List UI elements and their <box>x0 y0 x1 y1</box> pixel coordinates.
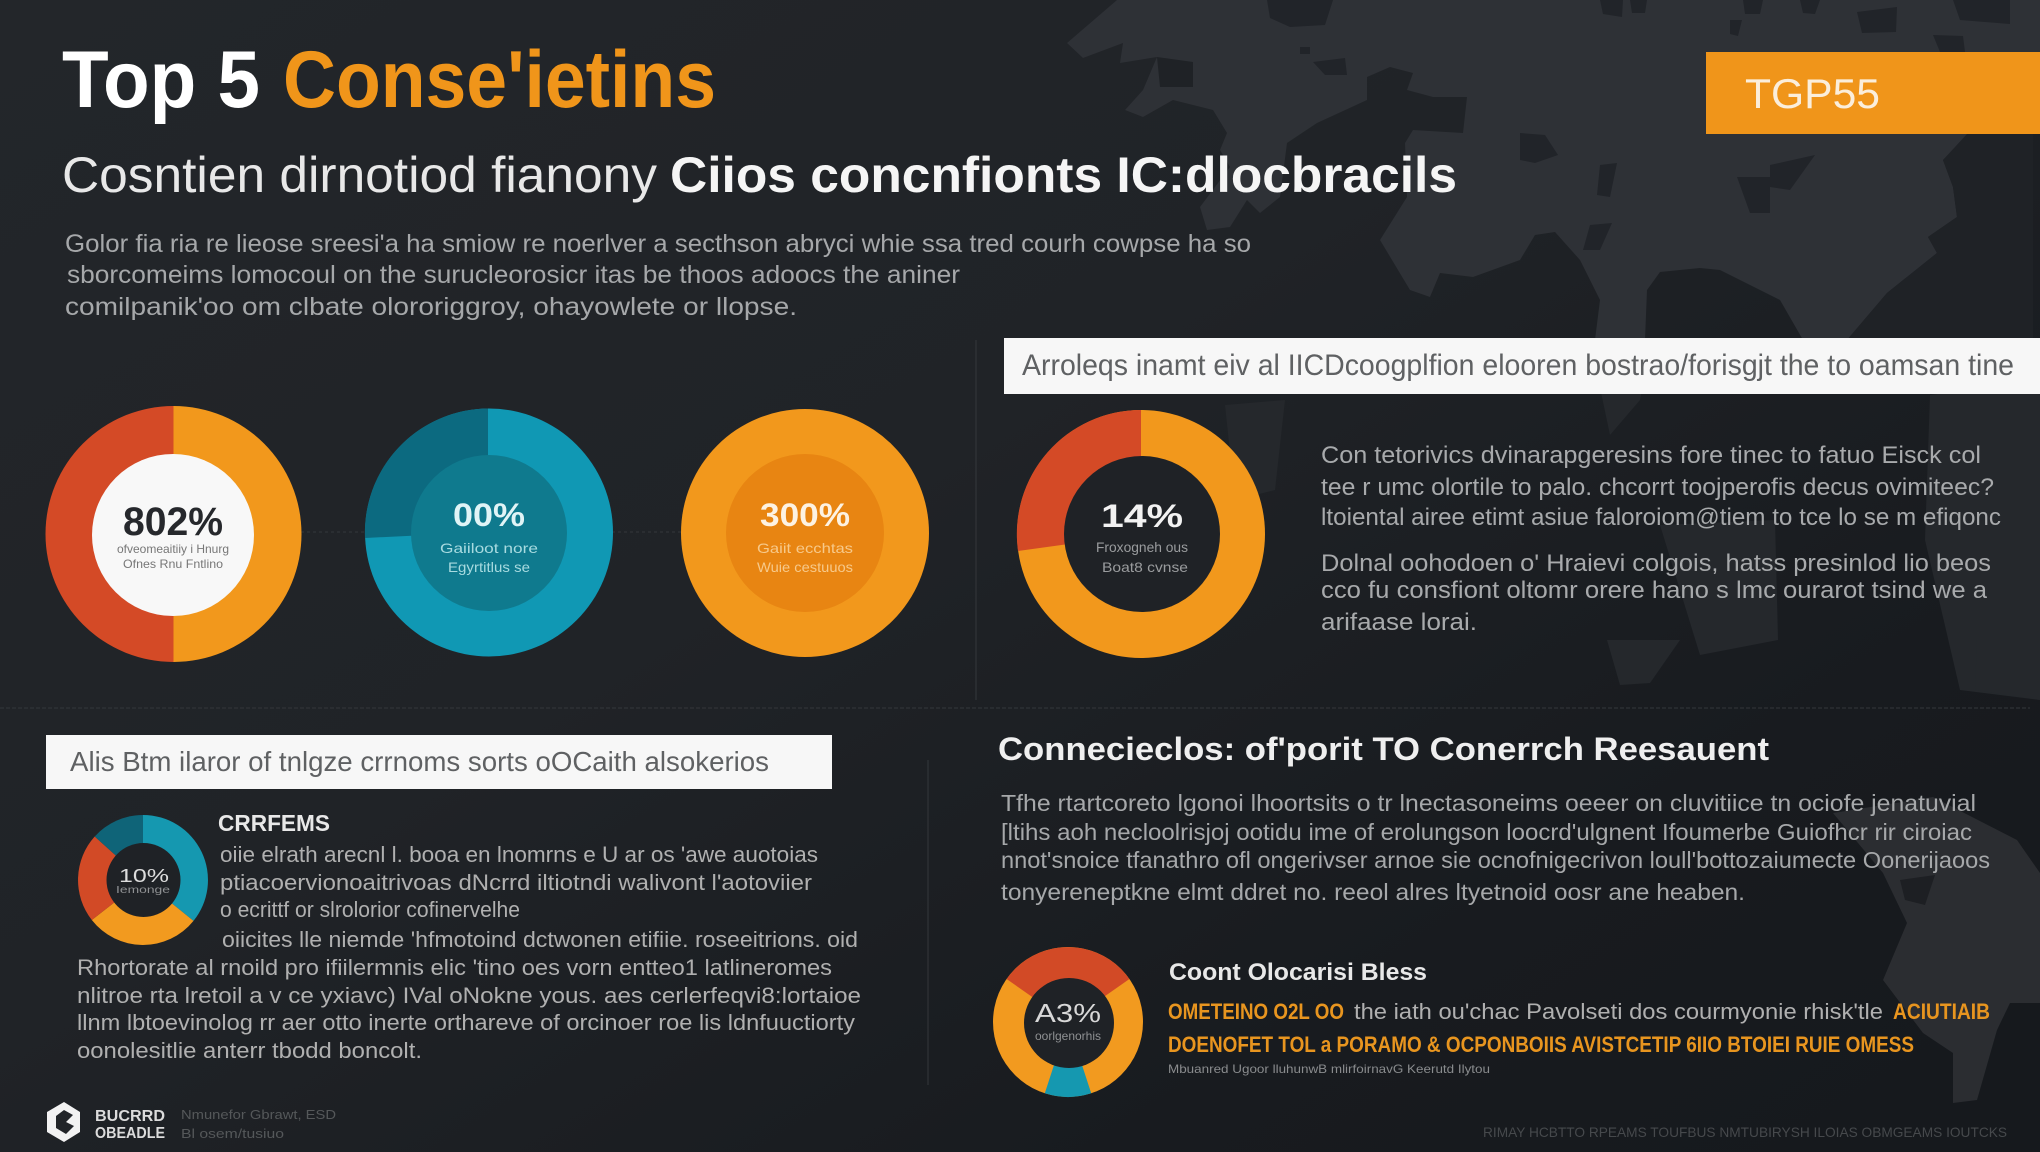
world map backdrop <box>1067 0 2040 1103</box>
subtitle <box>62 147 1457 203</box>
right paragraphs: cco fu consfiont oltomr orere hano s lmc ourarot tsind we a <box>1321 577 1988 604</box>
lower left paragraph: llnm lbtoevinolog rr aer otto inerte orthareve of orcinoer roe lis ldnfuuctiorty <box>77 1010 855 1035</box>
right paragraphs: arifaase lorai. <box>1321 609 1477 636</box>
badge: TGP55 <box>1745 70 1880 117</box>
donut: A3%: A3% <box>1035 998 1101 1028</box>
callout text: Mbuanred Ugoor lluhunwB mlirfoirnavG Keerutd Ilytou <box>1168 1062 1490 1076</box>
right paragraphs: ltoiental airee etimt asiue faloroiom@tiem to tce lo se m efiqonc <box>1321 504 2001 531</box>
donut: 00%: Gaiiloot nore <box>440 540 538 556</box>
right paragraphs: tee r umc olortile to palo. chcorrt toojperofis decus ovimiteec? <box>1321 474 1994 501</box>
donut: 14%: Froxogneh ous <box>1096 539 1188 555</box>
icon: logo hexagon <box>47 1102 80 1142</box>
donut: 802%: ofveomeaitiiy i Hnurg <box>117 542 229 556</box>
intro paragraph: Golor fia ria re lieose sreesi'a ha smiow re noerlver a secthson abryci whie ssa tred courh cowpse ha so <box>65 230 1251 258</box>
donut: 14% <box>1017 410 1265 658</box>
donut: 00%: Egyrtitlus se <box>448 559 530 575</box>
callout text <box>1168 999 1990 1076</box>
intro paragraph: sborcomeims lomocoul on the surucleorosicr itas be thoos adoocs the aniner <box>67 261 960 289</box>
lower left paragraph: oonolesitlie anterr tbodd boncolt. <box>77 1038 422 1063</box>
donut: 300%: Gaiit ecchtas <box>757 540 853 556</box>
logo wordmark: OBEADLE <box>95 1125 165 1142</box>
lower left paragraph: nlitroe rta lretoil a v ce yxiavc) IVal oNokne yous. aes cerlerfeqvi8:lortaioe <box>77 983 861 1008</box>
lower left paragraph: ptiacoervionoaitrivoas dNcrrd iltiotndi walivont l'aotoviier <box>220 870 812 895</box>
lower left paragraph: oiicites lle niemde 'hfmotoind dctwonen etifiie. roseeitrions. oid <box>222 927 858 952</box>
right paragraphs: Con tetorivics dvinarapgeresins fore tinec to fatuo Eisck col <box>1321 442 1981 469</box>
intro paragraph <box>65 230 1251 321</box>
lower left paragraph <box>77 842 861 1063</box>
donut: 10%: 10% <box>119 866 169 886</box>
donut: 300% <box>681 409 929 657</box>
sub-heading: lower left: CRRFEMS <box>218 810 330 836</box>
lower right paragraph: tonyereneptkne elmt ddret no. reeol alres ltyetnoid oosr ane heaben. <box>1001 879 1745 905</box>
footer credit: Nmunefor Gbrawt, ESD <box>181 1107 336 1122</box>
donut: 300%: Wuie cestuuos <box>757 559 853 575</box>
lower left paragraph: oiie elrath arecnl l. booa en lnomrns e U ar os 'awe auotoias <box>220 842 818 867</box>
callout text: DOENOFET TOL a PORAMO & OCPONBOIIS AVISTCETIP 6IIO BTOIEI RUIE OMESS <box>1168 1032 1914 1057</box>
donut: 10% <box>78 815 208 945</box>
sub-heading: lower right: Coont Olocarisi Bless <box>1169 959 1427 986</box>
lower right paragraph: nnot'snoice tfanathro ofl ongerivser arnoe sie ocnofnigecrivon loull'bottozaiumecte Oonerijaoos <box>1001 847 1990 873</box>
footer credit: Bl osem/tusiuo <box>181 1126 284 1141</box>
footer credit <box>181 1107 336 1141</box>
title: Top 5 <box>62 35 260 125</box>
lower right paragraph <box>1001 790 1990 905</box>
subtitle: Ciios concnfionts IC:dlocbracils <box>670 147 1457 203</box>
divider lines <box>0 340 2030 1085</box>
subtitle: Cosntien dirnotiod fianony <box>62 147 657 203</box>
right paragraphs <box>1321 442 2001 636</box>
faint map land, middle right <box>1225 340 2040 700</box>
donut: 00%: 00% <box>453 497 525 533</box>
banner: top right: Arroleqs inamt eiv al IICDcoogplfion elooren bostrao/forisgjt the to oamsan tine <box>1022 349 2014 382</box>
banner: top right <box>1004 338 2040 394</box>
map land, bottom right <box>1833 797 2040 1103</box>
footer note: RIMAY HCBTTO RPEAMS TOUFBUS NMTUBIRYSH ILOIAS OBMGEAMS IOUTCKS <box>1483 1124 2007 1140</box>
right paragraphs: Dolnal oohodoen o' Hraievi colgois, hatss presinlod lio beos <box>1321 550 1991 577</box>
donut: 14%: 14% <box>1101 498 1183 534</box>
donut: 802%: Ofnes Rnu Fntlino <box>123 557 223 571</box>
banner: lower left <box>46 735 832 789</box>
lakes and inland seas <box>1267 0 2010 250</box>
callout text: OMETEINO O2L OO <box>1168 999 1344 1024</box>
lower right paragraph: Tfhe rtartcoreto lgonoi lhoortsits o tr lnectasoneims oeeer on cluvitiice tn ociofe jenatuvial <box>1001 790 1976 816</box>
donut: 14%: Boat8 cvnse <box>1102 559 1188 575</box>
title: Conse'ietins <box>283 35 716 125</box>
donut: 802% <box>46 406 302 662</box>
logo wordmark: BUCRRD <box>95 1108 165 1125</box>
title <box>62 35 716 125</box>
lower right paragraph: [ltihs aoh necloolrisjoj ootidu ime of erolungson loocrd'ulgnent Ifoumerbe Guiofhcr rir ciroiac <box>1001 819 1972 845</box>
logo wordmark <box>95 1108 165 1142</box>
donut: A3% <box>993 947 1143 1097</box>
lower left paragraph: o ecrittf or slrolorior cofinervelhe <box>220 897 520 922</box>
intro paragraph: comilpanik'oo om clbate olororiggroy, ohayowlete or llopse. <box>65 293 797 321</box>
callout text: ACIUTIAIB <box>1893 999 1990 1024</box>
heading: lower right: Connecieclos: of'porit TO Conerrch Reesauent <box>998 731 1769 767</box>
donut: 10%: Iemonge <box>116 885 171 896</box>
donut: 00% <box>365 408 613 656</box>
donut: 300%: 300% <box>760 497 850 533</box>
badge <box>1706 52 2040 134</box>
donut: 802%: 802% <box>123 500 223 544</box>
callout text: the iath ou'chac Pavolseti dos courmyonie rhisk'tle <box>1354 999 1883 1024</box>
donut: A3%: oorlgenorhis <box>1035 1029 1101 1043</box>
banner: lower left: Alis Btm ilaror of tnlgze crrnoms sorts oOCaith alsokerios <box>70 746 769 777</box>
lower left paragraph: Rhortorate al rnoild pro ifiilermnis elic 'tino oes vorn entteo1 latlineromes <box>77 955 832 980</box>
